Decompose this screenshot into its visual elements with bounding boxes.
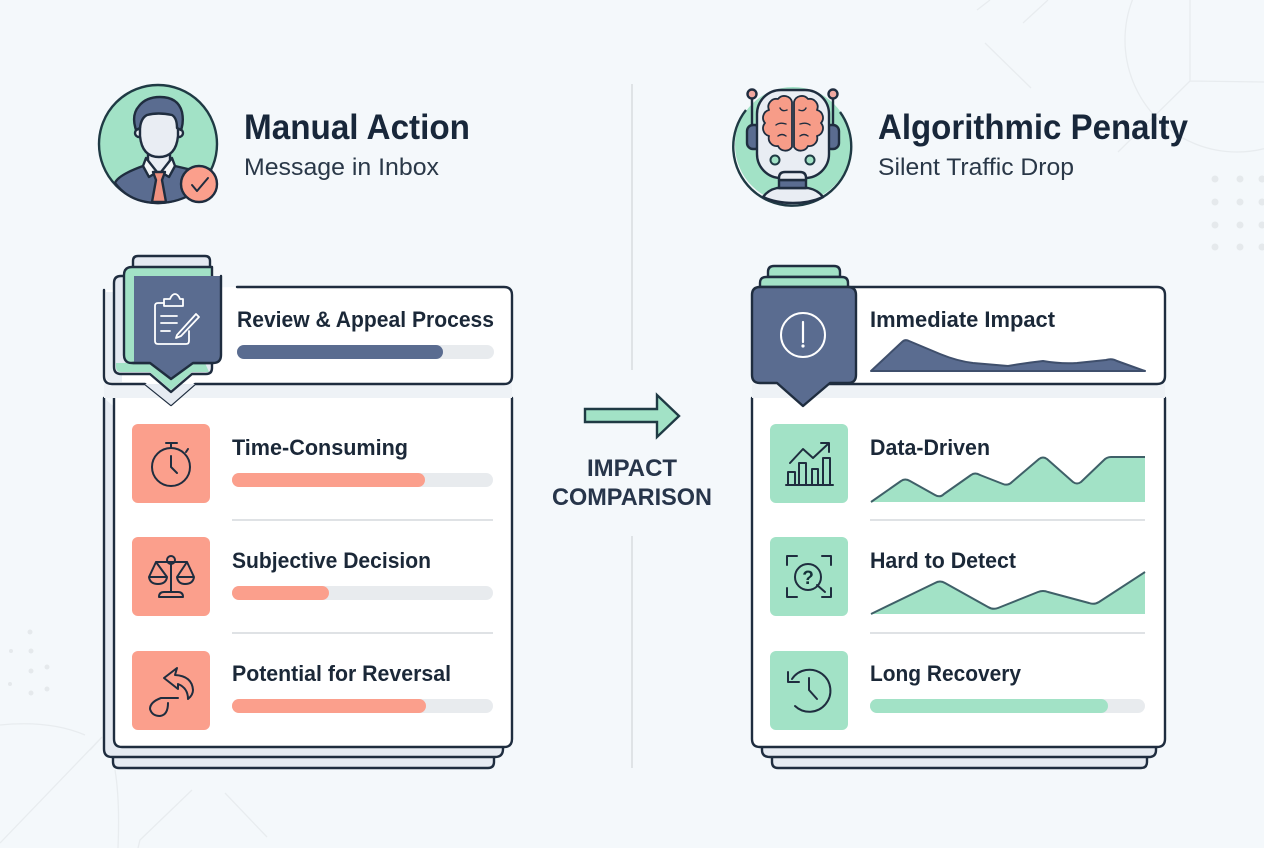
progress bar <box>237 345 494 359</box>
label: Immediate Impact <box>870 307 1056 332</box>
label: impact comparison: IMPACT <box>587 455 677 482</box>
panel: algorithmic penalty card stack <box>752 266 1165 768</box>
card: Immediate Impact <box>752 266 1165 406</box>
row: Hard to Detect <box>770 537 1145 616</box>
label: Data-Driven <box>870 435 990 460</box>
panel: Algorithmic Penalty header <box>733 87 1189 206</box>
heading: Algorithmic Penalty: Algorithmic Penalty <box>878 108 1189 147</box>
label: impact comparison <box>552 455 712 511</box>
progress bar <box>232 473 493 487</box>
arrow: impact comparison <box>585 395 679 437</box>
progress bar <box>870 699 1145 713</box>
panel: Manual Action header <box>99 85 470 203</box>
icon: scales <box>132 537 210 616</box>
heading: Manual Action: Manual Action <box>244 108 470 147</box>
area chart <box>871 340 1145 371</box>
icon: reversal arrow and hand <box>132 651 210 730</box>
progress bar <box>232 699 493 713</box>
card: Review & Appeal Process <box>104 256 512 405</box>
icon: businessman avatar <box>99 85 217 203</box>
row: Subjective Decision <box>132 537 493 616</box>
icon: magnifier question: ? <box>802 568 814 589</box>
icon badge: clipboard <box>114 256 221 392</box>
progress bar <box>232 586 493 600</box>
row: Data-Driven <box>770 424 1145 503</box>
icon: robot with brain <box>733 87 851 206</box>
label: Subjective Decision <box>232 548 431 573</box>
area chart <box>871 572 1145 614</box>
row: Time-Consuming <box>132 424 493 503</box>
label: Time-Consuming <box>232 435 408 460</box>
icon: magnifier question <box>770 537 848 616</box>
panel: manual action card stack <box>104 256 512 768</box>
label: Long Recovery <box>870 661 1022 686</box>
subheading: Silent Traffic Drop: Silent Traffic Drop <box>878 154 1074 181</box>
label: impact comparison: COMPARISON <box>552 484 712 511</box>
area chart <box>871 457 1145 502</box>
label: Review & Appeal Process <box>237 307 494 332</box>
row: Long Recovery <box>770 651 1145 730</box>
icon: stopwatch <box>132 424 210 503</box>
label: Potential for Reversal <box>232 661 451 686</box>
icon badge: warning <box>752 266 856 406</box>
subheading: Message in Inbox: Message in Inbox <box>244 154 439 181</box>
icon: growth chart <box>770 424 848 503</box>
icon: history clock <box>770 651 848 730</box>
label: Hard to Detect <box>870 548 1017 573</box>
row: Potential for Reversal <box>132 651 493 730</box>
